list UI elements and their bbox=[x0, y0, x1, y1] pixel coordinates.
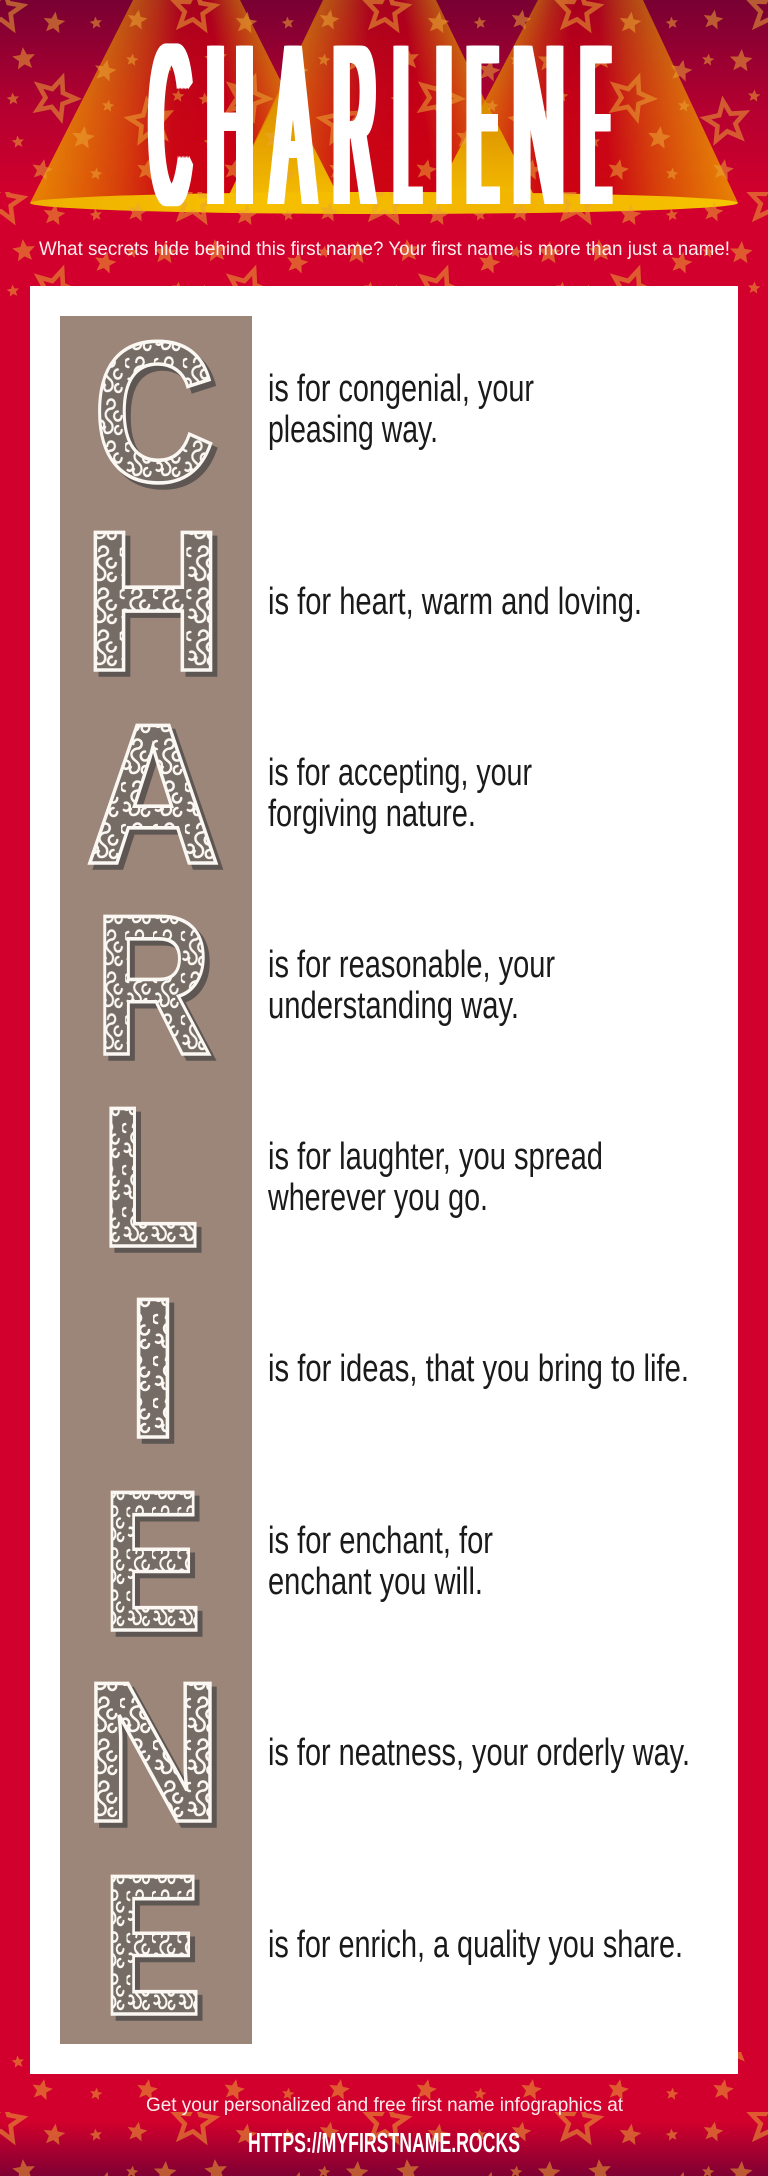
spotlights bbox=[30, 0, 738, 214]
letter A: A bbox=[85, 683, 221, 906]
text: E line: is for enchant, for bbox=[268, 1520, 493, 1562]
title: R bbox=[329, 0, 368, 253]
title: A bbox=[267, 0, 308, 253]
spotlight cone: left bbox=[30, 0, 326, 203]
text: E line: enchant you will. bbox=[268, 1561, 483, 1603]
spotlight cone: middle bbox=[230, 0, 485, 194]
letter E: E bbox=[102, 1834, 202, 2057]
text: E line bbox=[268, 1520, 493, 1603]
title: L bbox=[390, 0, 413, 253]
text: A line: is for accepting, your bbox=[268, 752, 532, 794]
letter I: I bbox=[125, 1257, 181, 1480]
text: R line: understanding way. bbox=[268, 985, 519, 1027]
white panel bbox=[30, 286, 738, 2074]
text: R line: is for reasonable, your bbox=[268, 944, 555, 986]
text: A line: forgiving nature. bbox=[268, 793, 476, 835]
text: L line: is for laughter, you spread bbox=[268, 1136, 603, 1178]
spotlight cone: right bbox=[452, 0, 738, 203]
text: C line bbox=[268, 368, 534, 451]
text: A line bbox=[268, 752, 532, 835]
text: C line: pleasing way. bbox=[268, 409, 438, 451]
text: L line bbox=[267, 1136, 603, 1219]
letter L: L bbox=[100, 1064, 200, 1289]
letter E: E bbox=[102, 1450, 202, 1673]
title: I bbox=[432, 0, 445, 253]
letter N: N bbox=[83, 1640, 223, 1864]
subtitle: What secrets hide behind this first name? Your first name is more than just a name! bbox=[39, 238, 730, 260]
letter H: H bbox=[82, 489, 224, 712]
letter R: R bbox=[94, 872, 212, 1097]
title: E bbox=[463, 0, 490, 253]
text: C line: is for congenial, your bbox=[268, 368, 534, 410]
text: L line: wherever you go. bbox=[267, 1177, 488, 1219]
overlap light: middle and right bbox=[452, 100, 533, 194]
footer text: Get your personalized and free first name infographics at bbox=[146, 2094, 624, 2116]
spotlight floor ellipse bbox=[30, 192, 738, 214]
text: R line bbox=[268, 944, 555, 1027]
letter C: C bbox=[93, 301, 215, 524]
title: H bbox=[202, 0, 247, 253]
title: N bbox=[508, 0, 558, 253]
title: E bbox=[577, 0, 603, 253]
letter column bbox=[60, 316, 252, 2044]
title bbox=[145, 0, 613, 253]
overlap light: left and middle bbox=[230, 96, 334, 194]
title: C bbox=[145, 0, 184, 253]
